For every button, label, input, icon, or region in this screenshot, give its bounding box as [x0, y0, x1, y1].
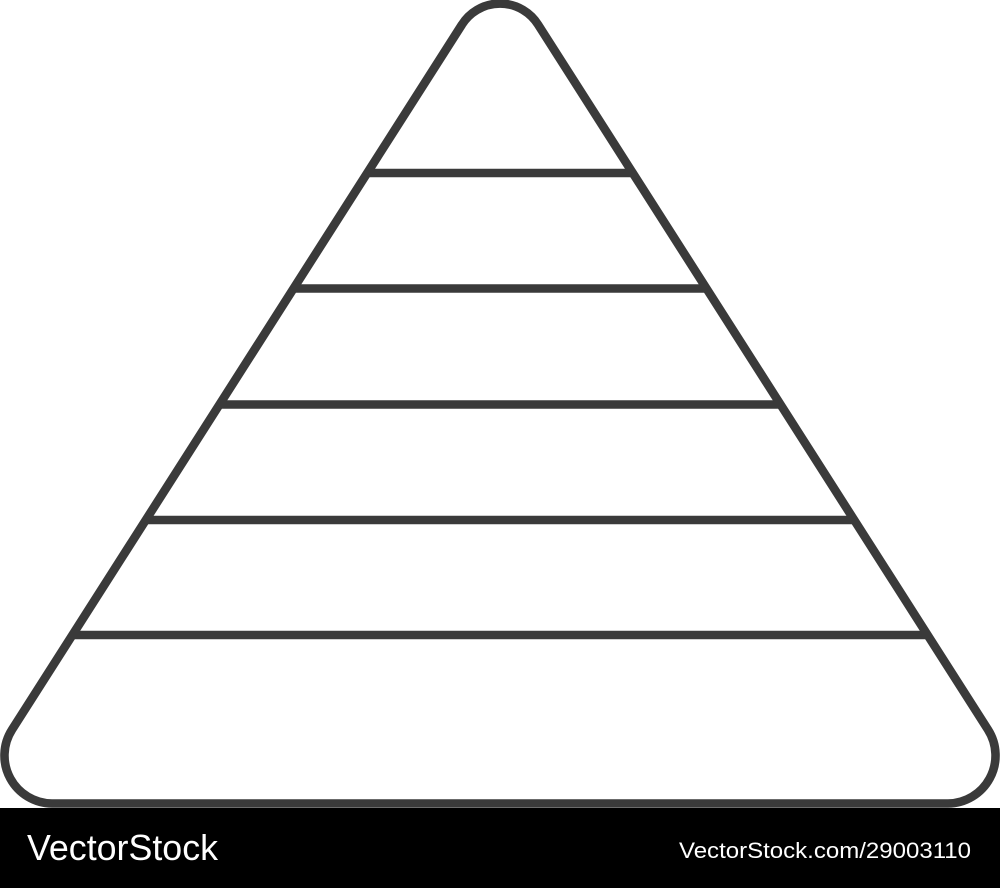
tier divider 5: [72, 631, 928, 639]
tier divider 3: [219, 400, 781, 409]
tier divider 2: [293, 284, 707, 293]
brand name: VectorStock: [27, 827, 219, 868]
tier divider 4: [146, 516, 854, 524]
watermark footer bar: [0, 808, 1000, 888]
image URL: VectorStock.com/29003110: [679, 838, 971, 863]
tier divider 1: [367, 169, 633, 177]
